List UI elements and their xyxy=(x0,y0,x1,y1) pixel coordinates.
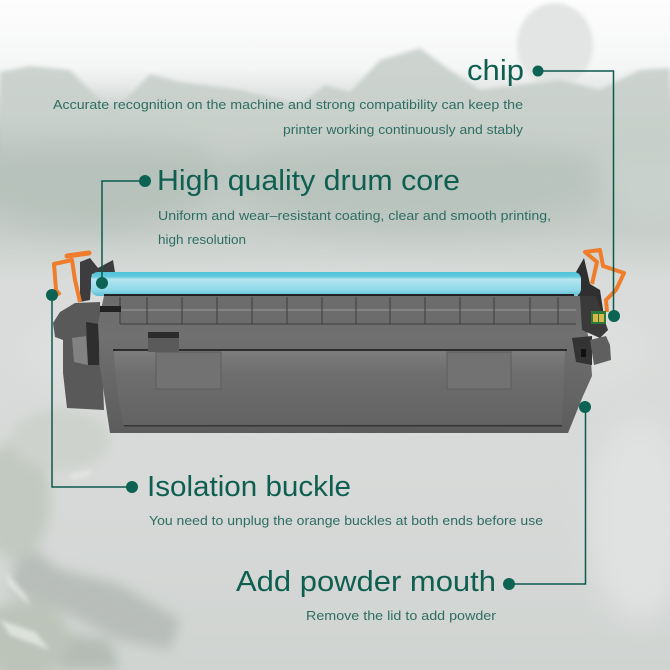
right latch dark xyxy=(572,336,592,365)
dot: powder on cartridge xyxy=(579,401,591,413)
leader line: drum xyxy=(102,181,145,283)
ribbed top panel xyxy=(120,297,576,324)
orange buckle: left xyxy=(54,260,80,302)
left clip xyxy=(100,306,121,312)
callout: add powder mouth xyxy=(236,401,591,623)
dot: chip on cartridge xyxy=(608,310,620,322)
dot: powder heading xyxy=(503,578,515,590)
leader line: buckle xyxy=(52,295,132,487)
heading: drum core: High quality drum core xyxy=(157,165,460,197)
left label panel xyxy=(156,352,221,389)
tree silhouettes xyxy=(517,3,593,87)
dot: buckle on cartridge xyxy=(46,289,58,301)
dot: chip heading xyxy=(532,66,544,76)
toner cartridge xyxy=(53,250,624,433)
groove line xyxy=(113,349,567,351)
leader line: chip xyxy=(538,71,614,316)
leader line: powder mouth xyxy=(509,407,586,584)
heading: chip: chip xyxy=(467,55,524,87)
dot: buckle heading xyxy=(126,481,138,493)
text: drum description line 2: high resolution xyxy=(158,233,246,247)
heading: add powder mouth: Add powder mouth xyxy=(236,566,496,598)
text: buckle description: You need to unplug the orange buckles at both ends before use xyxy=(149,514,543,528)
left drum bracket xyxy=(80,258,115,302)
left gear assembly xyxy=(53,302,104,410)
dot: drum on cartridge xyxy=(96,277,108,289)
left gear highlight xyxy=(72,336,88,365)
text: chip description line 1: Accurate recognition on the machine and strong compatibility can keep the xyxy=(53,98,523,112)
callout: drum core xyxy=(96,165,551,289)
orange buckle: right xyxy=(585,250,624,312)
text: chip description line 2: printer working continuously and stably xyxy=(283,123,524,137)
left tab xyxy=(148,332,179,352)
dot: drum heading xyxy=(139,175,151,187)
left tab dark top xyxy=(148,332,179,338)
left gear dark recess xyxy=(86,322,99,365)
orange buckle: left top xyxy=(67,253,89,256)
heading: isolation buckle: Isolation buckle xyxy=(147,471,351,503)
callout: chip xyxy=(53,55,620,322)
drum roller xyxy=(91,272,581,296)
bottom groove xyxy=(124,425,562,426)
right latch notch xyxy=(581,349,586,357)
cartridge main body xyxy=(98,296,592,433)
black top edge xyxy=(104,294,574,296)
chip xyxy=(591,311,606,324)
right drum bracket xyxy=(576,258,604,316)
right dark chip housing xyxy=(580,296,608,338)
text: drum description line 1: Uniform and wear–resistant coating, clear and smooth printing, xyxy=(158,209,551,223)
text: powder description: Remove the lid to add powder xyxy=(306,609,496,623)
callout: isolation buckle xyxy=(46,289,543,528)
lower cover xyxy=(114,351,565,425)
right label panel xyxy=(447,352,511,389)
right latch light xyxy=(590,336,611,365)
